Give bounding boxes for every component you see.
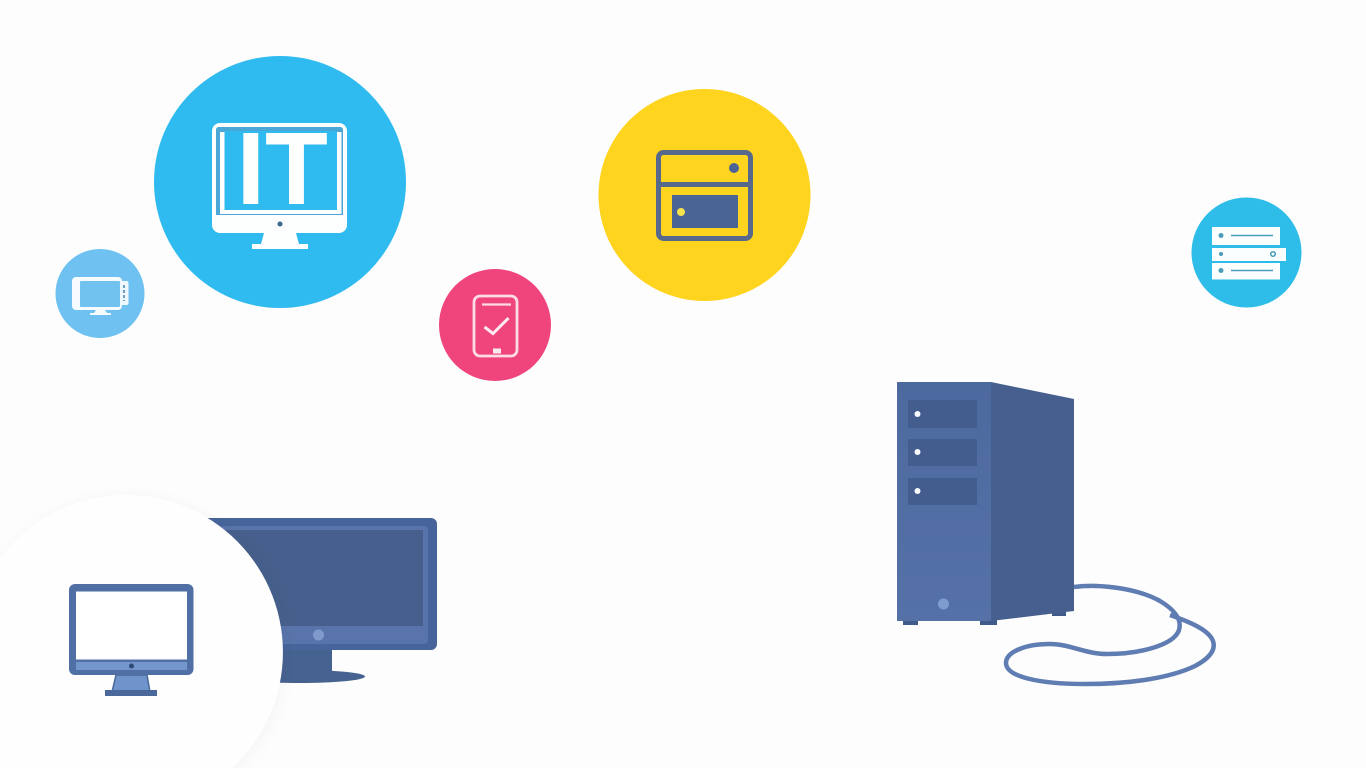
rack row 3 bbox=[1212, 263, 1280, 280]
lighter bezel bbox=[200, 526, 428, 644]
screen bbox=[76, 592, 187, 660]
rack lights bbox=[1218, 233, 1224, 273]
bay lights bbox=[914, 411, 920, 494]
monitor inner frame bbox=[220, 132, 342, 214]
side panel bbox=[991, 382, 1074, 621]
side panel bbox=[120, 281, 128, 305]
monitor inner band bbox=[216, 127, 343, 215]
rack row 1 bbox=[1212, 227, 1280, 245]
screen bbox=[80, 281, 120, 307]
chin bbox=[76, 662, 187, 670]
check mark bbox=[484, 318, 508, 334]
dark screen bbox=[200, 530, 423, 626]
bay 2 bbox=[908, 439, 977, 466]
front panel bbox=[897, 382, 991, 621]
icon: pink circle with phone check bbox=[439, 269, 551, 381]
rack ring bbox=[1271, 252, 1275, 256]
small monitor icon bbox=[69, 584, 194, 696]
dark monitor behind circle bbox=[190, 518, 437, 683]
screen frame bbox=[72, 277, 122, 310]
frame bbox=[69, 584, 194, 675]
bay 1 bbox=[908, 400, 977, 428]
drive button bbox=[729, 163, 739, 173]
monitor body bbox=[212, 123, 347, 233]
phone top line bbox=[482, 303, 511, 306]
icon: small light blue circle with monitor bbox=[56, 249, 144, 338]
power button bbox=[313, 630, 324, 640]
cable bbox=[1006, 586, 1214, 684]
monitor neck bbox=[270, 648, 332, 672]
IT label: I bbox=[236, 111, 265, 226]
bay 3 bbox=[908, 478, 977, 505]
monitor stand bbox=[252, 233, 308, 249]
drive outline bbox=[658, 152, 750, 238]
icon: large blue circle with IT monitor bbox=[154, 56, 406, 308]
phone outline bbox=[474, 296, 517, 356]
power button bbox=[938, 598, 949, 610]
tower server with cable bbox=[897, 382, 1214, 684]
rack lines bbox=[1231, 236, 1273, 270]
white circle panel bbox=[0, 495, 283, 768]
feet bbox=[903, 609, 1066, 625]
monitor outer body bbox=[190, 518, 437, 650]
drive slot bbox=[672, 195, 738, 228]
side panel detail bbox=[123, 285, 125, 301]
camera dot bbox=[129, 664, 134, 668]
IT label: T bbox=[265, 111, 328, 226]
stand base bbox=[105, 690, 157, 696]
home button bbox=[493, 348, 501, 354]
monitor camera dot bbox=[278, 222, 282, 226]
rack row 2 bbox=[1212, 248, 1286, 261]
drive divider bbox=[658, 182, 750, 187]
stand bbox=[112, 675, 150, 692]
icon: cyan circle with server rack bbox=[1192, 198, 1302, 308]
monitor base bbox=[235, 670, 365, 683]
icon: yellow circle with drive bbox=[598, 89, 810, 301]
stand bbox=[90, 310, 111, 315]
slot light bbox=[677, 208, 685, 216]
